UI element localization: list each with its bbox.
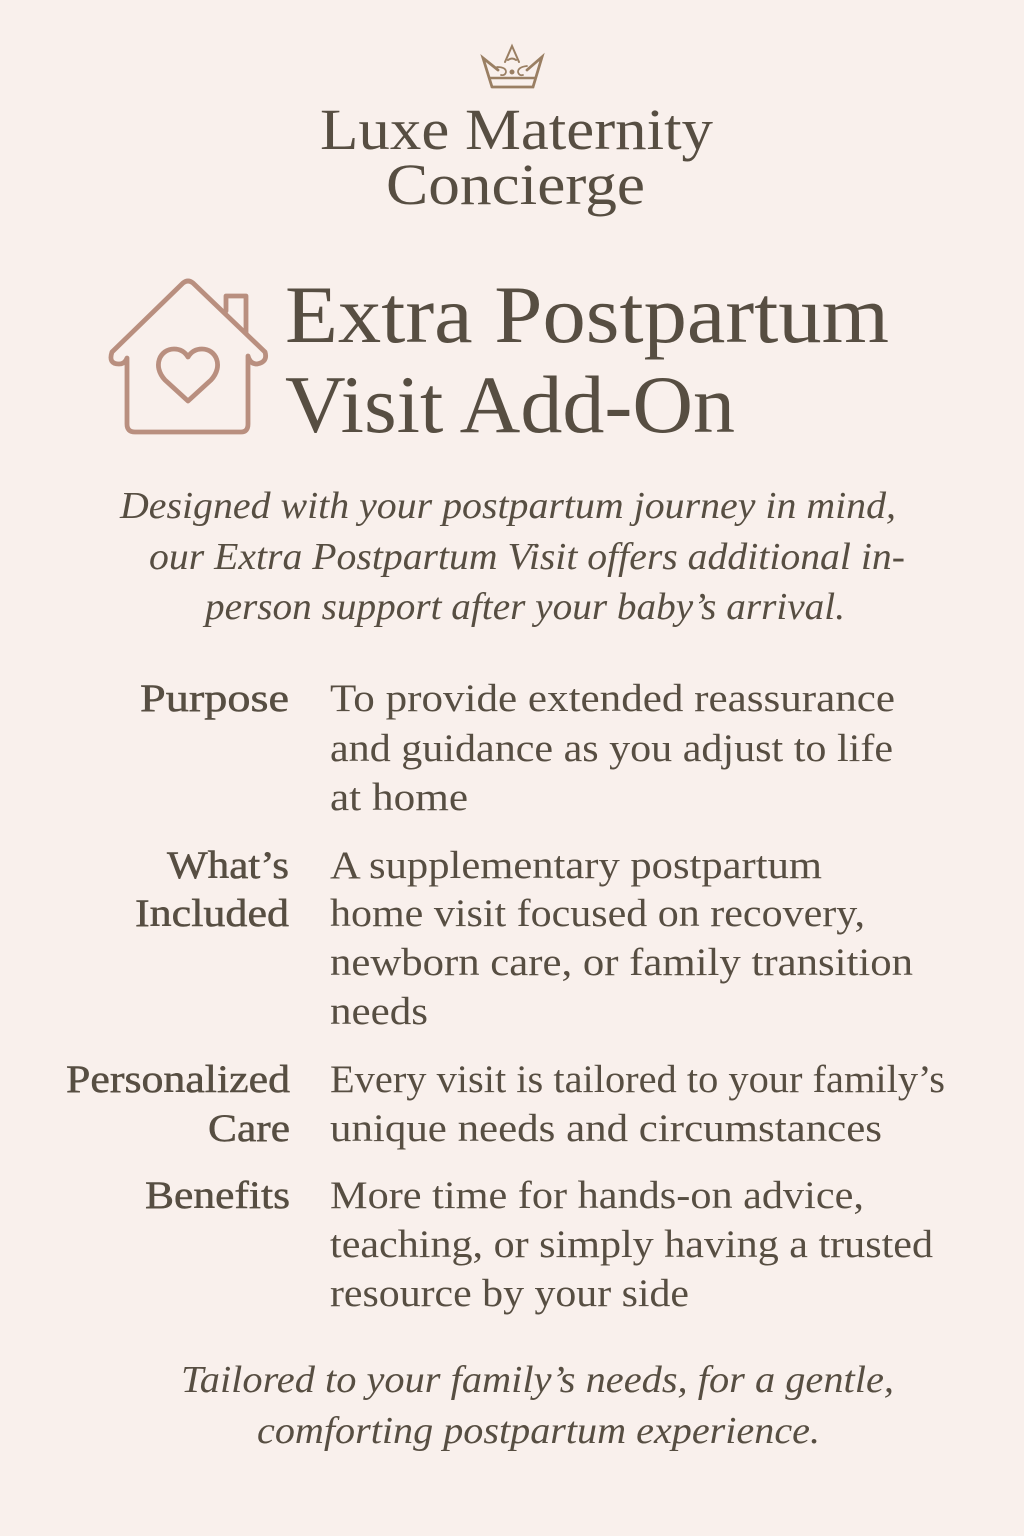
intro text: person support after your baby’s arrival. <box>202 586 845 628</box>
icon: house with heart <box>111 281 266 432</box>
row: what's included: A supplementary postpartum <box>330 844 822 887</box>
row: purpose <box>140 677 895 819</box>
intro text: our Extra Postpartum Visit offers additional in- <box>149 536 905 578</box>
row: personalized care <box>66 1058 945 1150</box>
row: purpose: at home <box>330 776 468 819</box>
brand name <box>320 97 713 217</box>
row: personalized care: Personalized <box>66 1058 291 1101</box>
row: what's included: home visit focused on recovery, <box>330 892 865 935</box>
row: what's included: Included <box>135 892 290 935</box>
row: personalized care: unique needs and circumstances <box>330 1107 882 1150</box>
row: what's included: needs <box>330 990 428 1033</box>
intro text <box>119 485 905 628</box>
intro text: Designed with your postpartum journey in mind, <box>119 485 896 527</box>
row: benefits: Benefits <box>145 1174 290 1217</box>
title: Extra Postpartum <box>285 269 889 360</box>
row: personalized care: Every visit is tailored to your family’s <box>330 1058 945 1101</box>
row: purpose: Purpose <box>140 677 289 720</box>
row: purpose: To provide extended reassurance <box>330 677 895 720</box>
closing text: comforting postpartum experience. <box>257 1410 820 1452</box>
row: benefits: More time for hands-on advice, <box>330 1174 864 1217</box>
row: benefits: resource by your side <box>330 1272 689 1315</box>
row: benefits <box>145 1174 934 1315</box>
row: what's included: newborn care, or family transition <box>330 941 913 984</box>
row: personalized care: Care <box>208 1107 290 1150</box>
row: purpose: and guidance as you adjust to life <box>330 727 893 770</box>
brand name: Concierge <box>386 152 645 217</box>
closing text <box>181 1359 894 1452</box>
icon: crown <box>483 46 542 87</box>
row: benefits: teaching, or simply having a trusted <box>330 1223 934 1266</box>
brand name: Luxe Maternity <box>320 97 713 162</box>
row: what's included: What’s <box>167 844 289 887</box>
title <box>285 269 889 450</box>
closing text: Tailored to your family’s needs, for a gentle, <box>181 1359 894 1401</box>
title: Visit Add-On <box>285 359 735 450</box>
row: what's included <box>135 844 913 1033</box>
